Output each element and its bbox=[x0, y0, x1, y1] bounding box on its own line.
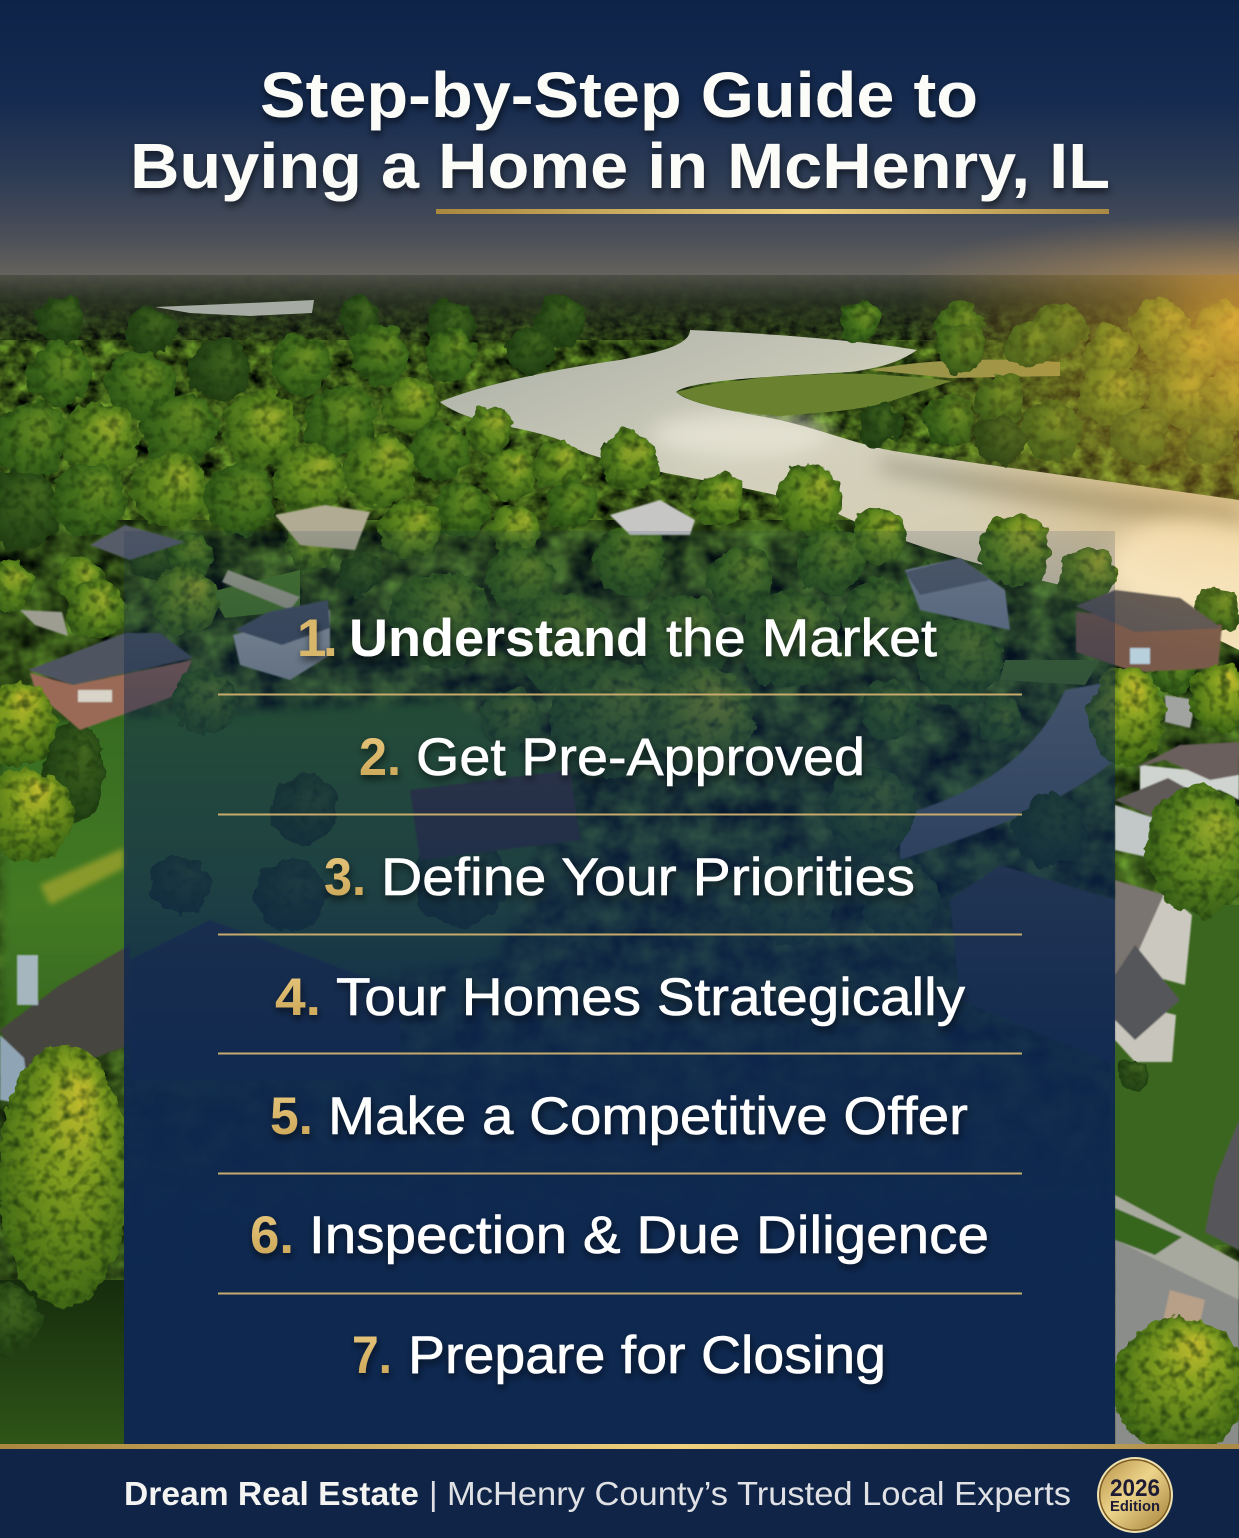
lawns bbox=[0, 570, 1239, 1450]
title: Step-by-Step Guide to bbox=[260, 59, 978, 131]
step 2: 2. bbox=[359, 728, 401, 787]
footer text bbox=[124, 1475, 1071, 1512]
badge: 2026 Edition: 2026 bbox=[1110, 1475, 1160, 1502]
house: shoreline gray bbox=[905, 558, 1010, 630]
title bbox=[130, 59, 1110, 202]
house: brick left bbox=[28, 633, 193, 730]
far right meadow bbox=[870, 360, 1060, 378]
aerial photo of McHenry river neighborhood bbox=[0, 275, 1239, 1453]
step 1 bbox=[297, 609, 937, 668]
step 1: Understand bbox=[349, 609, 649, 668]
island bbox=[676, 374, 952, 416]
steps list bbox=[250, 609, 989, 1385]
main river bbox=[440, 330, 1239, 650]
distant lake bbox=[155, 300, 314, 316]
footer text: McHenry County’s Trusted Local Experts bbox=[447, 1475, 1071, 1512]
title: Buying a Home in McHenry, IL bbox=[130, 130, 1110, 202]
house: large dark centre bbox=[950, 865, 1115, 1065]
house: right white 2 bbox=[1115, 778, 1190, 860]
step panel bbox=[124, 531, 1115, 1445]
sun glow bbox=[860, 275, 1239, 695]
step 1: . bbox=[323, 609, 338, 668]
trees bbox=[0, 294, 1239, 1356]
foreground trees bbox=[0, 566, 1239, 1453]
house: lower right bbox=[1115, 880, 1192, 1062]
house: lower left bbox=[0, 945, 130, 1105]
background sky bbox=[0, 0, 1239, 345]
badge: 2026 Edition: Edition bbox=[1110, 1498, 1160, 1515]
step 7: 7. bbox=[352, 1326, 392, 1385]
step 6: Inspection & Due Diligence bbox=[309, 1206, 989, 1265]
step 1: 1 bbox=[297, 609, 326, 668]
footer text: Dream Real Estate bbox=[124, 1475, 419, 1512]
title underline bbox=[436, 209, 1109, 214]
footer bar bbox=[0, 1444, 1239, 1538]
house: right white 1 bbox=[1135, 742, 1239, 800]
step 2: Get Pre-Approved bbox=[416, 728, 865, 787]
step 3: Define Your Priorities bbox=[381, 848, 915, 907]
step 6: 6. bbox=[250, 1206, 294, 1265]
houses bbox=[0, 500, 1239, 1105]
step 4: Tour Homes Strategically bbox=[336, 968, 966, 1027]
step 5: 5. bbox=[270, 1087, 313, 1146]
step 7: Prepare for Closing bbox=[408, 1326, 886, 1385]
foliage base bbox=[0, 275, 1239, 1450]
roads bbox=[20, 570, 1239, 1450]
footer text: | bbox=[429, 1475, 438, 1512]
badge: 2026 Edition bbox=[1097, 1457, 1173, 1533]
step 3: 3. bbox=[324, 848, 366, 907]
house: brick lakeside right bbox=[1076, 590, 1222, 672]
step 5: Make a Competitive Offer bbox=[328, 1087, 968, 1146]
step 4: 4. bbox=[275, 968, 321, 1027]
step 1: the Market bbox=[666, 609, 937, 668]
house: gray center left bbox=[233, 600, 330, 680]
house: small tan bbox=[275, 505, 370, 550]
